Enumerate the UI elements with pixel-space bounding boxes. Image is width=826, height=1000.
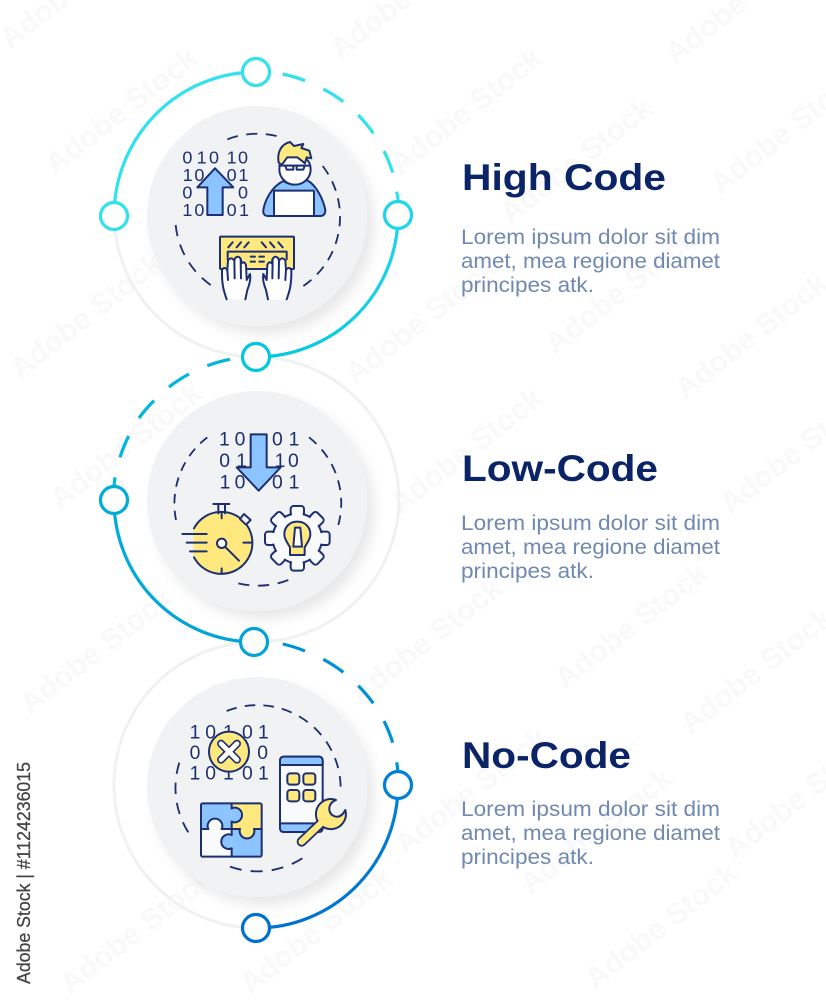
text block: low-code description: principes atk.: [461, 560, 594, 583]
faint background watermark: Adobe Stock: [494, 91, 659, 231]
timeline arc: step 2: [114, 359, 254, 642]
text block: high code description: amet, mea regione diamet: [461, 250, 720, 273]
icon: high code developer: [176, 134, 340, 299]
crossed circle: [209, 732, 249, 772]
binary digits: 1001: [183, 165, 248, 185]
binary digits: 00: [190, 743, 268, 764]
text block: no-code description: amet, mea regione diamet: [461, 822, 720, 845]
faint background watermark: Adobe Stock: [14, 581, 179, 721]
binary digits: 1001: [182, 200, 249, 220]
keyboard with hands: [220, 237, 294, 299]
stopwatch: [182, 504, 252, 574]
text block: high code description: principes atk.: [461, 274, 594, 297]
binary digits: [190, 722, 269, 785]
faint background watermark: Adobe Stock: [384, 381, 549, 521]
down arrow: [237, 434, 281, 491]
faint background watermark: Adobe Stock: [384, 41, 549, 181]
phone: [280, 757, 323, 832]
faint background watermark: Adobe Stock: [54, 861, 219, 1000]
icon: no-code puzzle and phone: [175, 705, 346, 871]
faint background watermark: Adobe Stock: [579, 856, 744, 996]
text block: high code description: Lorem ipsum dolor sit dim: [461, 226, 720, 249]
text block: low-code description: Lorem ipsum dolor sit dim: [461, 512, 720, 535]
faint background watermark: Adobe Stock: [549, 556, 714, 696]
timeline arc: step 3: [256, 644, 398, 928]
binary digits: 10101: [190, 764, 269, 785]
binary digits: [219, 430, 299, 493]
faint background watermark: Adobe Stock: [4, 246, 169, 386]
binary digits: 1001: [220, 472, 299, 493]
faint background watermark: Adobe Stock: [39, 41, 204, 181]
faint background watermark: Adobe Stock: [514, 761, 679, 901]
faint guide rings: [114, 216, 399, 928]
heading: no-code: No-Code: [462, 735, 631, 776]
text block: low-code description: amet, mea regione diamet: [461, 536, 720, 559]
panel: low-code circle: [147, 391, 367, 611]
binary digits: 01010: [182, 147, 248, 167]
faint background watermark: Adobe Stock: [344, 571, 509, 711]
binary digits: 10101: [190, 722, 269, 743]
faint background watermark: Adobe Stock: [44, 376, 209, 516]
text block: no-code description: principes atk.: [461, 846, 594, 869]
binary digits: [182, 147, 249, 220]
puzzle: [201, 803, 262, 857]
gear with light bulb: [265, 506, 330, 571]
developer with laptop: [263, 142, 325, 216]
icon: low-code stopwatch and gear: [174, 430, 341, 586]
faint background watermark: Adobe Stock: [389, 721, 554, 861]
binary digits: 00: [182, 182, 248, 202]
faint background watermark: Adobe Stock: [539, 221, 704, 361]
timeline arc: step 1: [114, 72, 398, 357]
wrench: [302, 799, 346, 842]
up arrow: [197, 168, 233, 215]
text block: no-code description: Lorem ipsum dolor sit dim: [461, 798, 720, 821]
heading: low-code: Low-Code: [462, 448, 658, 489]
timeline nodes: [100, 58, 412, 942]
heading: high code: High Code: [462, 157, 666, 198]
binary digits: 0110: [219, 451, 299, 472]
faint background watermark: Adobe Stock: [339, 251, 504, 391]
binary digits: 1001: [219, 430, 299, 451]
panel: high code circle: [147, 106, 367, 326]
faint background watermark: Adobe Stock: [234, 861, 399, 1000]
panel: no-code circle: [147, 677, 367, 897]
side credit text: Adobe Stock | #1124236015: [14, 762, 34, 984]
